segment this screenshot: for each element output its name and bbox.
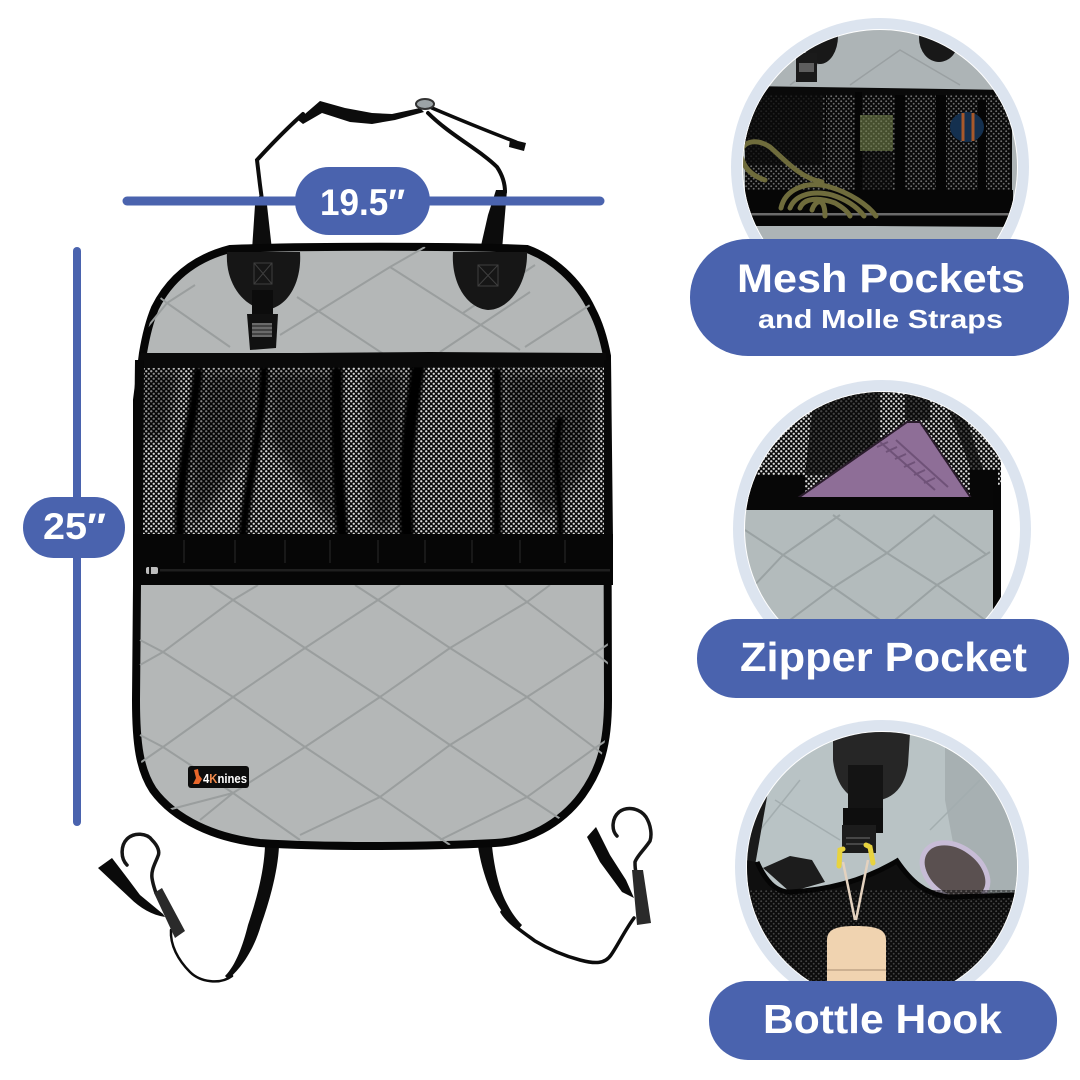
organizer body [133,247,613,846]
width label pill [295,167,430,235]
brand label: 4Knines [203,772,247,786]
molle strap band [133,534,613,585]
zipper [146,567,610,574]
top attachment patches [227,252,527,310]
right hook [587,809,651,925]
width dimension line [127,167,600,235]
side bindings [133,360,613,540]
photo: mesh pockets detail [743,30,1017,239]
height label pill [23,497,125,558]
label pill: bottle hook [709,981,1057,1060]
ring [735,720,1029,1014]
patch stitching [254,263,498,286]
lower straps and cords [171,912,634,981]
width label pill: 19.5″ [320,182,405,223]
label pill: mesh pockets: and Molle Straps [758,304,1003,334]
label pill: mesh pockets: Mesh Pockets [737,257,1025,301]
ring [731,18,1029,316]
left hook [98,834,185,938]
label pill: zipper pocket: Zipper Pocket [740,634,1027,680]
right lower strap [478,846,522,930]
label pill: zipper pocket [697,619,1069,698]
quilting stitches [140,247,610,845]
top pocket binding [136,352,607,368]
mesh pocket [133,352,613,540]
top hanging strap [252,101,526,250]
panel: zipper pocket [697,380,1069,698]
panel: bottle hook [709,720,1057,1060]
label pill: bottle hook: Bottle Hook [763,996,1002,1042]
photo: bottle hook detail [747,732,1017,981]
product: back seat organizer [98,99,651,981]
mesh folds [180,368,560,534]
height dimension line [23,251,125,822]
label pill: mesh pockets [690,239,1069,356]
buckle [247,290,278,350]
ring [733,380,1031,678]
height label pill: 25″ [43,506,106,547]
brand label [188,766,249,788]
panel: mesh pockets [690,8,1069,356]
left lower strap [225,846,279,979]
photo: zipper pocket detail [745,385,1001,625]
strap adjuster [416,99,434,109]
